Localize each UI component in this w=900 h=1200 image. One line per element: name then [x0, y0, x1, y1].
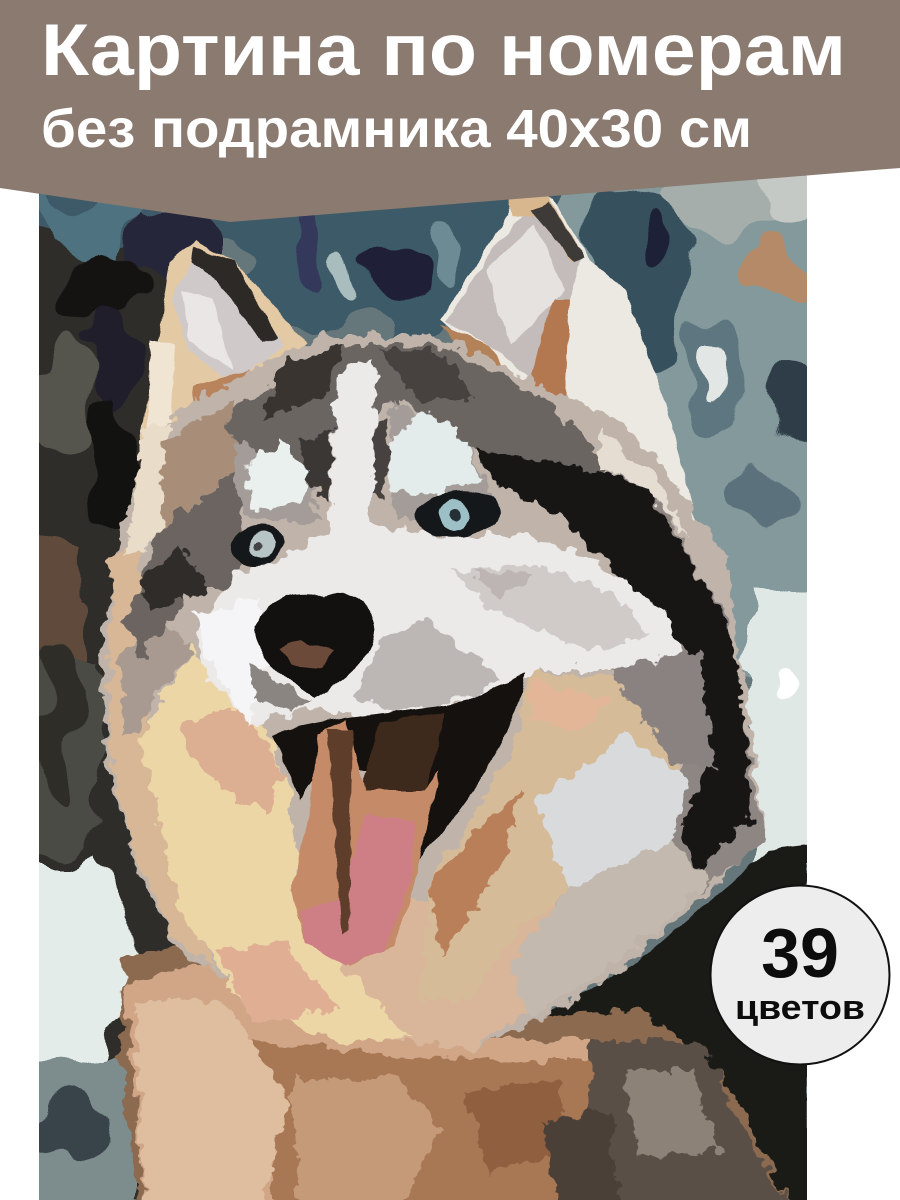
dark fur bottom right	[548, 844, 807, 1200]
left eye	[230, 524, 285, 567]
right eye	[414, 490, 501, 538]
nose	[255, 593, 375, 698]
fur beneath mouth right	[427, 669, 680, 903]
shading round muzzle	[355, 620, 500, 712]
header banner	[0, 0, 900, 222]
background: painted bokeh	[39, 176, 807, 1200]
tongue	[292, 720, 440, 965]
cheek fur grey right	[620, 473, 766, 895]
white muzzle mask	[195, 360, 695, 725]
right dark band	[475, 450, 750, 870]
tan cheek left	[140, 650, 410, 1040]
head fur	[100, 335, 765, 1050]
head base	[100, 335, 765, 1050]
badge: 39 colours: 39	[761, 914, 839, 992]
lower neck peach	[340, 898, 555, 1054]
dark left side	[125, 470, 245, 660]
badge: 39 colours	[710, 886, 890, 1064]
right ear	[440, 190, 700, 540]
title: Картина по номерам	[41, 10, 846, 91]
subtitle: без подрамника 40х30 см	[41, 99, 752, 159]
chest fur	[120, 935, 790, 1200]
left ear	[140, 240, 308, 440]
mouth	[272, 672, 525, 865]
badge: 39 colours: цветов	[735, 989, 865, 1027]
forehead grey	[224, 341, 606, 474]
painting: husky portrait	[39, 176, 807, 1200]
